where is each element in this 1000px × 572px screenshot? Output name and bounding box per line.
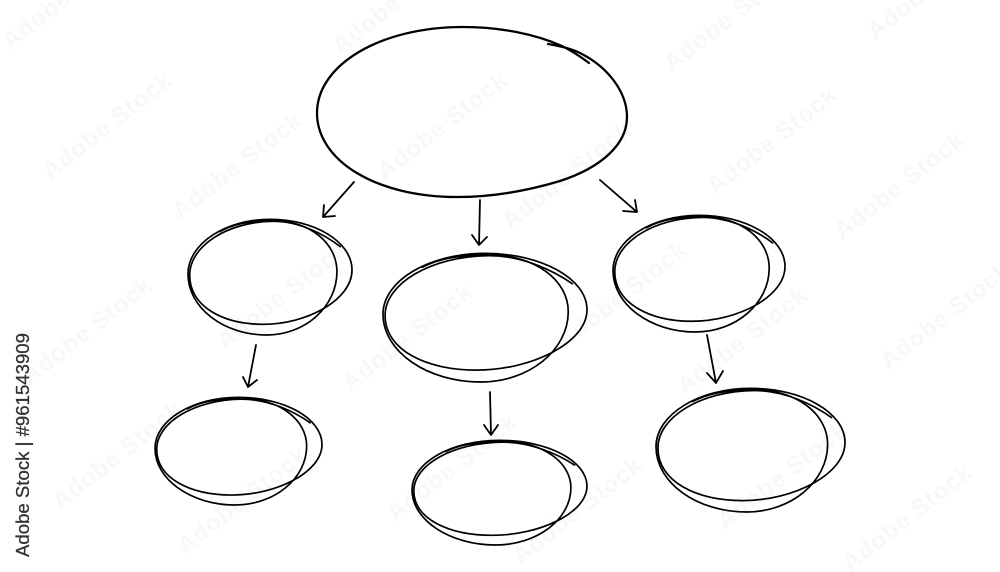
arrow: top to middle (472, 200, 487, 245)
background watermarks: Adobe Stock (672, 281, 813, 400)
arrow: top to right (600, 180, 637, 212)
background watermarks: Adobe Stock (829, 126, 970, 245)
oval: left upper (188, 219, 352, 335)
oval: left lower (155, 397, 322, 505)
arrow: middle upper to middle lower (484, 392, 498, 435)
background watermarks: Adobe Stock (382, 408, 523, 527)
background watermarks: Adobe Stock (372, 66, 513, 185)
background watermarks: Adobe Stock (702, 81, 843, 200)
background watermarks: Adobe Stock (212, 236, 353, 355)
background watermarks: Adobe Stock (37, 66, 178, 185)
background watermarks: Adobe Stock (172, 441, 313, 560)
arrow: right upper to right lower (707, 335, 723, 383)
oval: right lower (656, 388, 845, 512)
oval: middle upper (383, 253, 587, 382)
oval: middle lower (412, 440, 587, 545)
background watermarks: Adobe Stock (497, 116, 638, 235)
vertical credit text: Adobe Stock | #961543909 (13, 333, 33, 557)
background watermarks: Adobe Stock (167, 106, 308, 225)
arrow: left upper to left lower (243, 345, 257, 387)
background watermarks: Adobe Stock (552, 236, 693, 355)
top oval (317, 27, 627, 197)
arrow: top to left (323, 182, 354, 217)
background watermarks: Adobe Stock (47, 396, 188, 515)
oval: right upper (613, 215, 785, 332)
background watermarks: Adobe Stock (507, 451, 648, 570)
background watermarks: Adobe Stock (17, 271, 158, 390)
background watermarks: Adobe Stock (712, 416, 853, 535)
background watermarks: Adobe Stock (337, 278, 478, 397)
